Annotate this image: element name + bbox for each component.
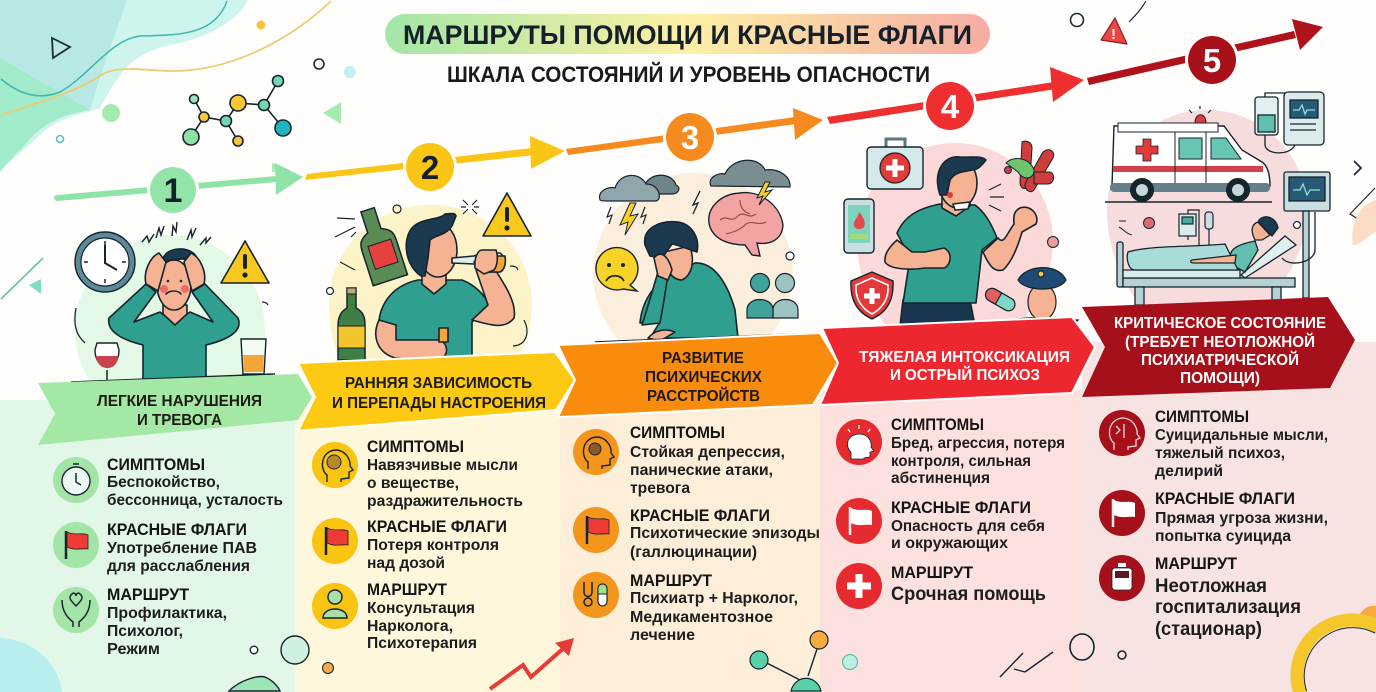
text: red flags: попытка суицида (1155, 528, 1291, 545)
icon: medical cross (836, 563, 882, 609)
illustration 2: man drinking (326, 193, 532, 362)
banner 1 (38, 374, 312, 445)
text: symptoms: раздражительность (367, 493, 523, 510)
panel: stage 1 details (53, 456, 283, 658)
icon: clock (75, 232, 135, 292)
icon: two people (747, 274, 798, 318)
title pill: МАРШРУТЫ ПОМОЩИ И КРАСНЫЕ ФЛАГИ (403, 20, 972, 50)
text: red flags: для расслабления (107, 558, 250, 575)
banner 3: РАССТРОЙСТВ (647, 386, 760, 405)
icon: first aid kit (867, 139, 923, 189)
text: route: Медикаментозное (630, 609, 773, 626)
stress lightning marks (142, 222, 211, 245)
table line (71, 374, 275, 382)
zigzag red growth arrow (490, 638, 574, 689)
text: symptoms: СИМПТОМЫ (1155, 408, 1249, 426)
text: red flags (107, 521, 257, 575)
icon: red flag (53, 522, 99, 568)
text: red flags: и окружающих (891, 535, 1008, 552)
text: red flags (367, 518, 507, 572)
text: symptoms: Навязчивые мысли (367, 457, 518, 474)
icon: warning triangle (483, 193, 531, 236)
banner 1: ЛЕГКИЕ НАРУШЕНИЯ (97, 393, 262, 410)
panel: stage 5 details (1099, 408, 1328, 640)
text: red flags: КРАСНЫЕ ФЛАГИ (630, 507, 770, 525)
text: route: МАРШРУТ (1155, 555, 1237, 573)
decoration: top-right shapes: ! (1111, 26, 1116, 43)
text: symptoms: панические атаки, (630, 462, 773, 479)
banner 3: РАЗВИТИЕ (662, 350, 744, 367)
icon: vitals monitor (1282, 172, 1330, 298)
text: symptoms (891, 416, 1065, 487)
icon: white flag (836, 498, 882, 544)
text: route: Психотерапия (367, 635, 477, 652)
subtitle: ШКАЛА СОСТОЯНИЙ И УРОВЕНЬ ОПАСНОСТИ (447, 62, 930, 87)
text: symptoms: СИМПТОМЫ (630, 424, 725, 442)
panel: stage 3 details (573, 424, 820, 644)
icon: head with marks (1099, 410, 1145, 456)
icon: capsule (983, 286, 1017, 313)
text: red flags: КРАСНЫЕ ФЛАГИ (367, 518, 507, 536)
text: symptoms: контроля, сильная (891, 453, 1031, 470)
icon: IV bag and monitor (1255, 92, 1324, 153)
text: route: госпитализация (1155, 597, 1301, 618)
text: route: Психиатр + Нарколог, (630, 590, 798, 607)
icon: glass of juice (241, 339, 266, 374)
icon: brain with storm cloud (709, 160, 790, 256)
text: red flags: КРАСНЫЕ ФЛАГИ (107, 521, 247, 539)
text: red flags: Опасность для себя (891, 518, 1045, 535)
icon: wine glass (95, 343, 119, 381)
banner 2: РАННЯЯ ЗАВИСИМОСТЬ (345, 375, 532, 392)
banner 5: ПОМОЩИ) (1180, 370, 1260, 387)
text: route: Психолог, (107, 623, 183, 640)
text: red flags (630, 507, 820, 561)
text: symptoms (107, 456, 283, 509)
text: symptoms: тревога (630, 480, 690, 497)
icon: head with brain (573, 429, 619, 475)
icon: virus/bacteria (1004, 141, 1054, 192)
text: route: лечение (630, 627, 695, 644)
text: red flags: Прямая угроза жизни, (1155, 510, 1328, 527)
banner 5: (ТРЕБУЕТ НЕОТЛОЖНОЙ (1125, 332, 1315, 351)
icon: sad face (596, 248, 638, 291)
text: red flags: (галлюцинации) (630, 544, 757, 561)
banner 2: И ПЕРЕПАДЫ НАСТРОЕНИЯ (332, 395, 546, 412)
road line (1105, 201, 1272, 203)
text: symptoms: СИМПТОМЫ (367, 438, 464, 456)
icon: stethoscope and pill (573, 572, 619, 618)
banner 4: И ОСТРЫЙ ПСИХОЗ (890, 365, 1040, 384)
icon: phone (844, 199, 874, 253)
arrow 1 with number (57, 163, 303, 216)
figure (376, 214, 514, 360)
text: symptoms: о веществе, (367, 475, 459, 492)
illustration 1: anxious man (71, 222, 275, 382)
arrow 1 with number: 1 (164, 172, 182, 210)
text: route: Консультация (367, 600, 475, 617)
icon: standing bottle (338, 288, 365, 360)
text: route: Профилактика, (107, 605, 227, 622)
text: symptoms (1155, 408, 1328, 480)
text: red flags: КРАСНЫЕ ФЛАГИ (891, 499, 1031, 517)
text: symptoms: тяжелый психоз, (1155, 445, 1285, 462)
icon: head with brain (312, 442, 358, 488)
text: route: МАРШРУТ (107, 586, 189, 604)
text: route (1155, 555, 1301, 640)
arrow 2 with number: 2 (421, 149, 439, 186)
text: red flags (1155, 490, 1328, 545)
decoration: molecule (183, 76, 291, 146)
decoration: bottom shapes (0, 606, 1376, 692)
icon: head silhouette with rays (836, 419, 882, 465)
text: route: МАРШРУТ (891, 564, 973, 582)
icon: police officer (1008, 268, 1078, 322)
arrow 5 with number: 5 (1203, 42, 1221, 79)
text: route: МАРШРУТ (367, 581, 447, 599)
icon: hospital bed and patient (1117, 217, 1296, 305)
banner 4: ТЯЖЕЛАЯ ИНТОКСИКАЦИЯ (859, 349, 1070, 366)
decoration: top-left blobs and curves (0, 0, 356, 299)
banner 1: И ТРЕВОГА (137, 412, 222, 429)
icon: ambulance (1110, 106, 1270, 202)
banner 5: ПСИХИАТРИЧЕСКОЙ (1141, 350, 1299, 369)
text: symptoms (367, 438, 523, 510)
panel: stage 4 details (836, 416, 1065, 609)
text: symptoms: СИМПТОМЫ (891, 416, 984, 434)
banner 5 (1082, 297, 1355, 397)
illustration 4: aggressive man (844, 139, 1078, 326)
text: red flags: Психотические эпизоды (630, 525, 820, 542)
text: route: Срочная помощь (891, 584, 1046, 605)
text: symptoms: СИМПТОМЫ (107, 456, 205, 474)
text: route: МАРШРУТ (630, 572, 712, 590)
icon: tilted bottle (350, 204, 408, 286)
text: route: Нарколога, (367, 618, 453, 635)
illustration 3: depressed man (593, 160, 798, 342)
text: route: Неотложная (1155, 576, 1267, 597)
text: symptoms: Бред, агрессия, потеря (891, 435, 1065, 452)
text: red flags: КРАСНЫЕ ФЛАГИ (1155, 490, 1295, 508)
icon: lightning bolt (693, 191, 700, 214)
banner 4 (820, 317, 1095, 405)
icon: red flag (573, 507, 619, 553)
icon: warning triangle (221, 241, 269, 283)
text: red flags: Употребление ПАВ (107, 540, 257, 557)
banner 3: ПСИХИЧЕСКИХ (645, 369, 762, 386)
icon: red flag (312, 518, 358, 564)
decoration: top-right shapes (1070, 1, 1376, 245)
arrow 5 with number (1087, 19, 1323, 87)
text: symptoms: бессонница, усталость (107, 492, 283, 509)
icon: ambulance front (1099, 555, 1145, 601)
arrow 4 with number: 4 (941, 88, 960, 125)
icon: small device and IV (1179, 210, 1213, 246)
text: route (367, 581, 477, 652)
icon: stopwatch (53, 457, 99, 503)
icon: person (312, 583, 358, 629)
text: red flags: Потеря контроля (367, 537, 499, 554)
text: route: Режим (107, 641, 160, 658)
banner 2 (298, 352, 575, 431)
figure (885, 157, 1037, 326)
figure (109, 249, 239, 379)
icon: storm clouds left (600, 175, 679, 235)
illustration 5: ambulance and hospital (1105, 92, 1330, 305)
column backgrounds (0, 342, 1376, 692)
arrow 2 with number (305, 136, 565, 194)
table line (328, 353, 532, 362)
text: symptoms: Суицидальные мысли, (1155, 427, 1328, 444)
icon: shield (851, 272, 893, 319)
text: symptoms: Беспокойство, (107, 474, 220, 491)
table line (595, 334, 795, 342)
text: symptoms: абстиненция (891, 470, 990, 487)
icon: white flag (1099, 490, 1145, 536)
figure (640, 222, 738, 341)
text: route (891, 564, 1046, 605)
arrow 3 with number (566, 108, 823, 164)
text: symptoms: делирий (1155, 463, 1223, 480)
text: red flags: над дозой (367, 555, 445, 572)
banner 5: КРИТИЧЕСКОЕ СОСТОЯНИЕ (1114, 315, 1326, 332)
banner 3 (558, 333, 838, 417)
icon: caring hands (53, 587, 99, 633)
text: route (630, 572, 798, 644)
text: symptoms (630, 424, 785, 497)
arrow 3 with number: 3 (681, 119, 699, 156)
text: red flags (891, 499, 1045, 552)
text: route: (стационар) (1155, 619, 1262, 640)
panel: stage 2 details (312, 438, 523, 652)
text: symptoms: Стойкая депрессия, (630, 444, 785, 461)
arrow 4 with number (827, 67, 1084, 133)
text: route (107, 586, 227, 658)
